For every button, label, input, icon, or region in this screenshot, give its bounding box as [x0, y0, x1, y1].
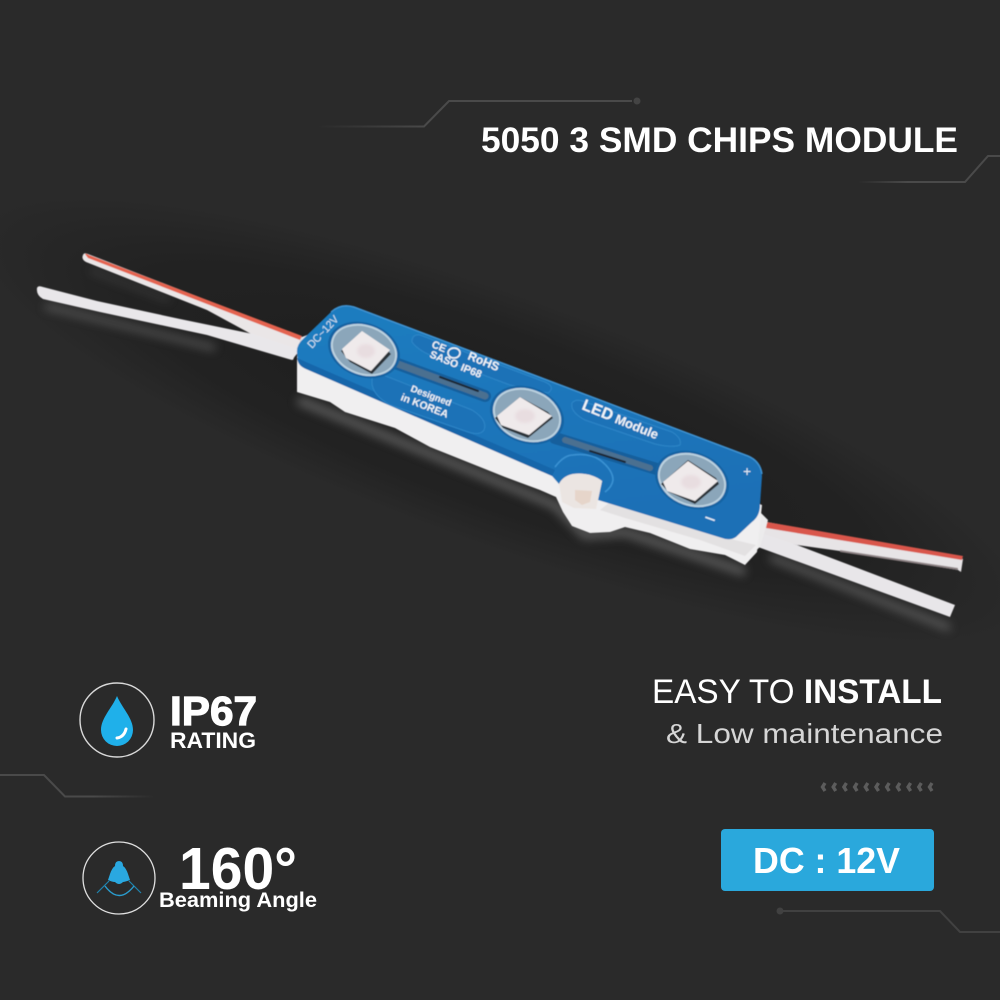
module print: voltage: DC~12V	[305, 313, 342, 351]
module print: plus: +	[743, 463, 751, 479]
circuit line: top	[317, 98, 640, 126]
module print: designed in Korea: in KOREA	[399, 392, 450, 421]
plate front edge	[297, 358, 555, 476]
module print: minus	[705, 516, 715, 521]
wires: left	[37, 253, 302, 360]
beaming angle label: Beaming Angle	[159, 889, 317, 912]
white base	[297, 355, 762, 565]
LED 1	[320, 312, 408, 388]
module print: designed in Korea: Designed	[409, 384, 453, 409]
module body	[37, 253, 963, 617]
rating label: RATING	[170, 728, 256, 753]
module print: ratings: CE	[430, 339, 448, 355]
title: 5050 3 SMD CHIPS MODULE	[481, 121, 958, 160]
module print: ratings: SASO	[428, 349, 460, 371]
notch mount	[555, 455, 613, 509]
blue top plate	[297, 306, 762, 539]
LED module product photo	[37, 253, 963, 628]
easy to install heading: EASY TO INSTALL	[652, 673, 942, 711]
plate top highlight	[331, 306, 762, 474]
connector: right	[733, 507, 768, 554]
badge background	[721, 829, 934, 891]
module print: ratings: RoHS	[466, 349, 501, 374]
wires: right	[758, 522, 963, 617]
voltage badge	[721, 829, 934, 891]
base shading	[600, 502, 756, 556]
background shadow around module	[0, 111, 1000, 729]
badge text: DC : 12V	[753, 840, 900, 881]
beaming angle feature	[83, 836, 317, 914]
LED 2	[482, 376, 572, 454]
IP67 label: IP67	[170, 688, 257, 734]
160 degree label: 160°	[179, 836, 297, 902]
LED 3	[647, 441, 737, 519]
icon: beam angle	[83, 842, 155, 914]
chevron row	[822, 783, 932, 791]
low maintenance subheading: & Low maintenance	[666, 718, 943, 749]
reflection glow	[45, 270, 950, 628]
circuit line: left	[0, 775, 155, 796]
connector: left	[296, 330, 320, 365]
IP67 feature	[80, 683, 257, 757]
recessed channel	[395, 363, 660, 470]
icon: water drop	[80, 683, 154, 757]
module print: ratings: IP68	[459, 362, 484, 381]
panels	[372, 335, 680, 446]
module print: ratings	[428, 339, 501, 381]
circuit line: top right	[858, 156, 1000, 182]
circuit line: bottom right	[776, 908, 1000, 932]
module print: LED Module: LED Module	[580, 397, 661, 443]
